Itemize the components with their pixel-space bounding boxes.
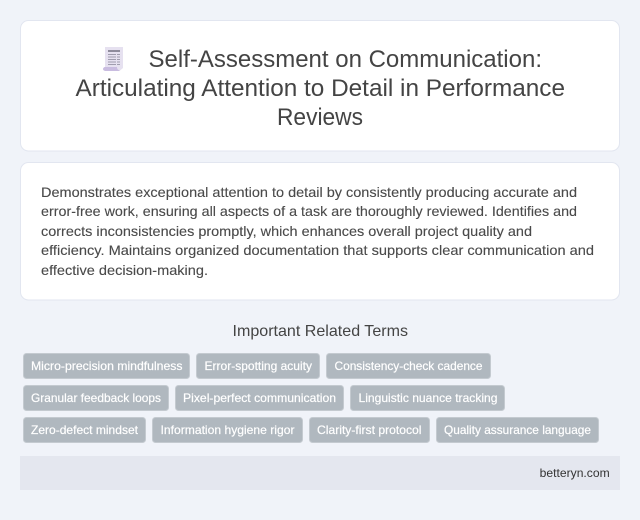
tag: Consistency-check cadence bbox=[334, 359, 483, 373]
description text: efficiency. Maintains organized documentation that supports clear communication and bbox=[41, 242, 594, 258]
tag: Zero-defect mindset bbox=[31, 423, 139, 437]
tag bbox=[196, 354, 320, 378]
tags: related terms bbox=[24, 354, 598, 442]
tag bbox=[350, 386, 504, 410]
tag bbox=[152, 418, 302, 442]
tag bbox=[176, 386, 344, 410]
panel: title bbox=[20, 20, 620, 151]
tag: Pixel-perfect communication bbox=[183, 391, 336, 405]
tag: Linguistic nuance tracking bbox=[358, 391, 498, 405]
title text: Self-Assessment on Communication: bbox=[148, 46, 542, 73]
tag: Clarity-first protocol bbox=[317, 423, 422, 437]
description text: Demonstrates exceptional attention to detail by consistently producing accurate and bbox=[41, 184, 577, 200]
description text bbox=[41, 184, 594, 278]
tag bbox=[436, 418, 598, 442]
tag: Quality assurance language bbox=[444, 423, 591, 437]
title text: Articulating Attention to Detail in Performance bbox=[76, 75, 565, 102]
title text bbox=[76, 46, 565, 131]
tag bbox=[24, 354, 190, 378]
title text: Reviews bbox=[277, 104, 363, 131]
heading: related terms: Important Related Terms bbox=[232, 323, 408, 340]
description text: effective decision-making. bbox=[41, 262, 208, 278]
tag: Error-spotting acuity bbox=[204, 359, 312, 373]
tag: Information hygiene rigor bbox=[160, 423, 294, 437]
tag bbox=[24, 418, 146, 442]
footer: betteryn.com bbox=[540, 466, 610, 480]
tag: Micro-precision mindfulness bbox=[31, 359, 182, 373]
tag bbox=[326, 354, 490, 378]
tag bbox=[24, 386, 168, 410]
description text: corrects inconsistencies promptly, which enhances overall project quality and bbox=[41, 223, 532, 239]
icon: document scroll bbox=[103, 47, 123, 71]
description text: error-free work, ensuring all aspects of a task are thoroughly reviewed. Identifies and bbox=[41, 203, 577, 219]
footer bbox=[20, 456, 620, 490]
tag bbox=[310, 418, 430, 442]
panel: description bbox=[20, 162, 620, 300]
tag: Granular feedback loops bbox=[31, 391, 161, 405]
